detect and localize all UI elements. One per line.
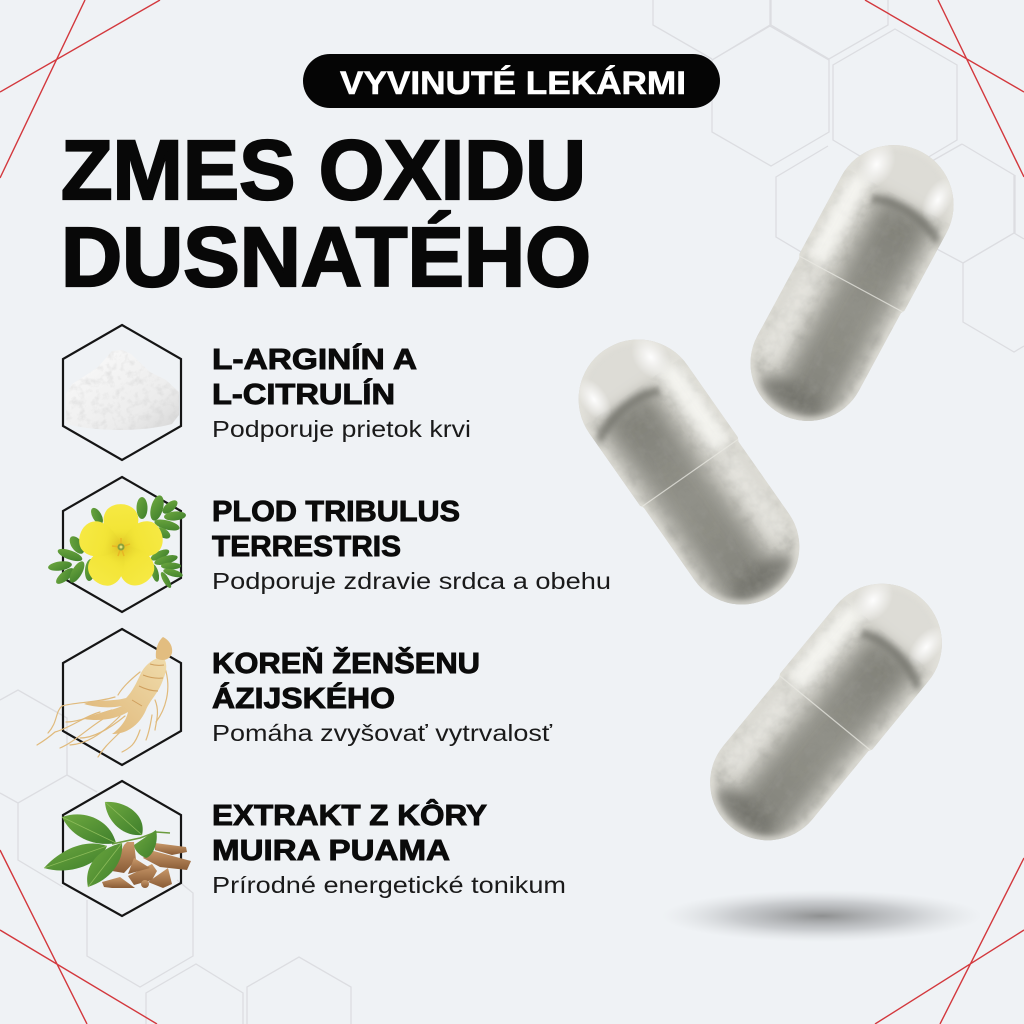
text: tribulus: PLOD TRIBULUS xyxy=(212,496,460,528)
text: ženšen: ÁZIJSKÉHO xyxy=(212,681,395,715)
capsule: top right xyxy=(716,103,993,451)
capsule: bottom right xyxy=(674,539,986,875)
ingredient: tribulus terrestris xyxy=(47,477,611,612)
title: ZMES OXIDU xyxy=(61,123,586,217)
text: muira puama: MUIRA PUAMA xyxy=(212,835,450,867)
text: l-arginín: L-ARGINÍN A xyxy=(212,342,417,376)
icon: powder in hexagon xyxy=(60,325,185,460)
text: l-arginín: Podporuje prietok krvi xyxy=(212,416,471,442)
ingredient: l-arginín a l-citrulín xyxy=(60,325,471,460)
text: tribulus xyxy=(212,496,611,594)
text: tribulus: TERRESTRIS xyxy=(212,531,401,563)
title xyxy=(61,123,591,304)
text: l-arginín xyxy=(212,342,471,442)
icon: leaves and bark in hexagon xyxy=(44,781,191,916)
icon: ginseng root in hexagon xyxy=(37,629,181,765)
text: muira puama xyxy=(212,798,566,898)
capsule: middle xyxy=(536,296,835,638)
text: ženšen xyxy=(212,646,552,746)
ingredient: ázijský ženšen xyxy=(37,629,552,765)
text: muira puama: Prírodné energetické tonikum xyxy=(212,872,566,898)
badge: vyvinuté lekármi: VYVINUTÉ LEKÁRMI xyxy=(340,65,686,101)
capsule ground shadow xyxy=(662,890,982,942)
icon: yellow flower in hexagon xyxy=(47,477,186,612)
text: muira puama: EXTRAKT Z KÔRY xyxy=(212,798,487,832)
text: tribulus: Podporuje zdravie srdca a obehu xyxy=(212,568,611,594)
title: DUSNATÉHO xyxy=(61,210,591,304)
text: l-arginín: L-CITRULÍN xyxy=(212,377,395,411)
text: ženšen: KOREŇ ŽENŠENU xyxy=(212,646,480,680)
badge: vyvinuté lekármi xyxy=(303,54,720,108)
ingredient: muira puama xyxy=(44,781,566,916)
text: ženšen: Pomáha zvyšovať vytrvalosť xyxy=(212,720,552,746)
